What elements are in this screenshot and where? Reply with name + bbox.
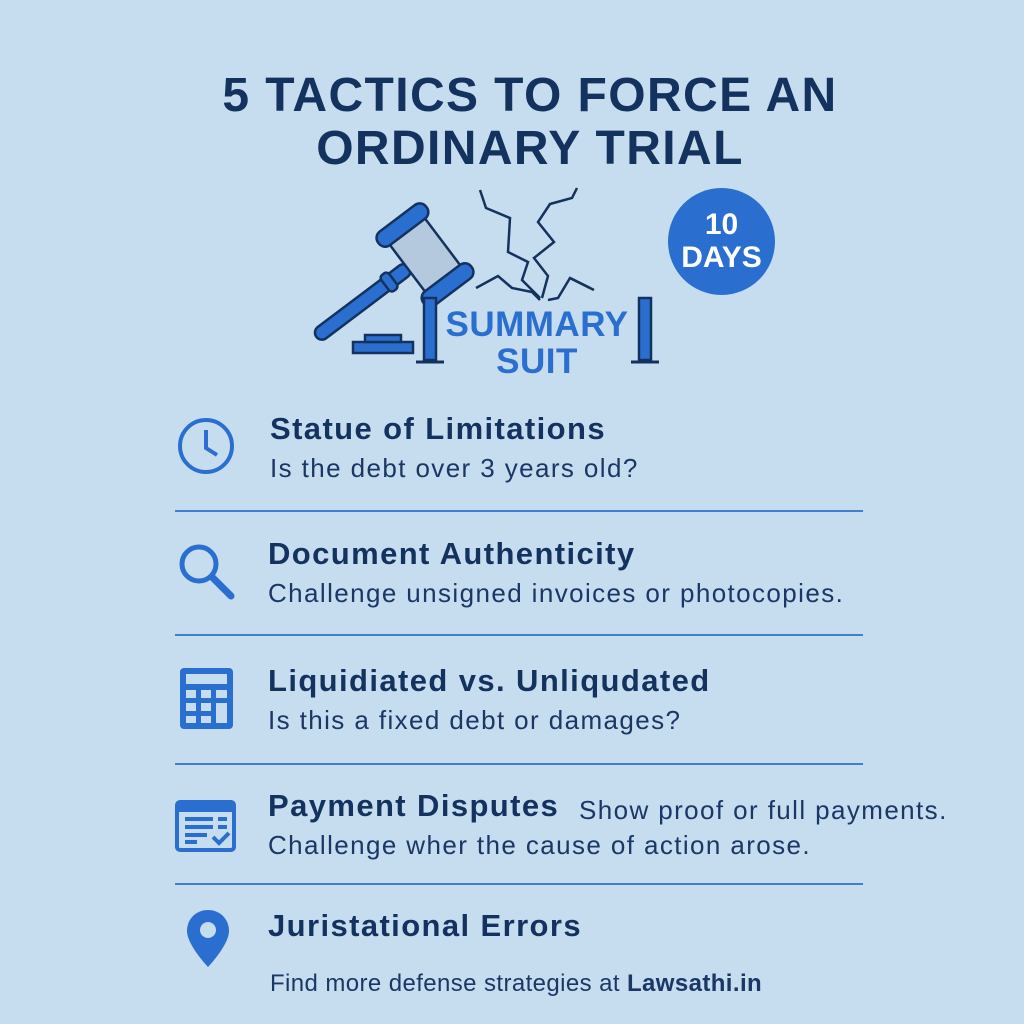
item 1: Is the debt over 3 years old? [270, 453, 639, 483]
item 1: Statue of Limitations [270, 411, 606, 446]
item 2: Document Authenticity [268, 536, 636, 571]
item 3: Liquidiated vs. Unliqudated [268, 663, 711, 698]
item 4: Challenge wher the cause of action arose. [268, 830, 811, 860]
badge: 10 days: DAYS [681, 241, 762, 274]
title: ORDINARY TRIAL [316, 122, 744, 175]
item 4 [175, 788, 948, 860]
hero illustration: gavel breaking summary suit [314, 188, 659, 380]
icon: magnifier [180, 544, 234, 600]
icon: clock [178, 418, 234, 474]
title [222, 69, 838, 175]
title: 5 TACTICS TO FORCE AN [222, 69, 838, 122]
icon: location pin [187, 910, 229, 967]
icon: calculator [180, 668, 233, 729]
hero illustration: gavel breaking summary suit: SUIT [496, 342, 578, 380]
item 4: Payment Disputes [268, 788, 559, 823]
item 1 [178, 411, 639, 483]
item 2: Challenge unsigned invoices or photocopies. [268, 578, 844, 608]
cracks [476, 188, 594, 300]
item 5 [187, 908, 582, 967]
footer: Find more defense strategies at Lawsathi.in [270, 970, 762, 997]
gavel [289, 200, 477, 374]
item 4: Show proof or full payments. [579, 795, 948, 825]
item 3: Is this a fixed debt or damages? [268, 705, 681, 735]
badge: 10 days: 10 [705, 208, 738, 241]
badge: 10 days [668, 188, 775, 295]
item 2 [180, 536, 844, 608]
icon: calendar list [175, 800, 236, 852]
item 3 [180, 663, 711, 735]
item 5: Juristational Errors [268, 908, 582, 943]
hero illustration: gavel breaking summary suit: SUMMARY [445, 305, 629, 344]
